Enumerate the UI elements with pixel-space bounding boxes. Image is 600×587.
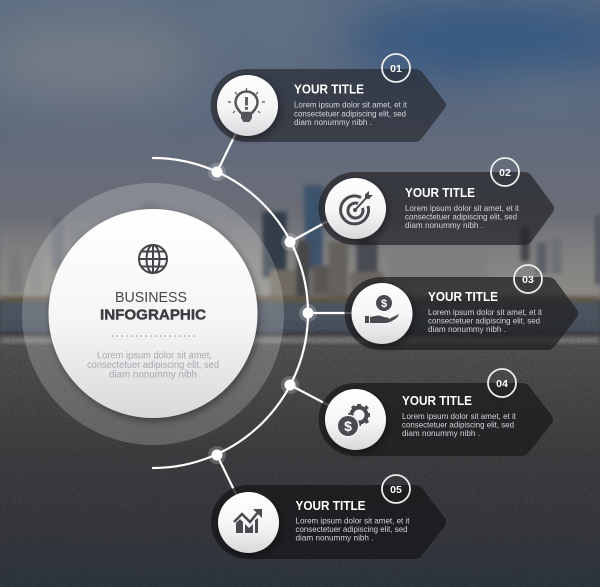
heading: INFOGRAPHIC bbox=[100, 306, 206, 324]
title and text: diam nonummy nibh . bbox=[294, 117, 372, 127]
arc nodes bbox=[208, 163, 317, 464]
icon: light bulb bbox=[228, 88, 265, 122]
title and text: YOUR TITLE bbox=[402, 393, 472, 408]
title and text: consectetuer adipiscing elit, sed bbox=[428, 316, 540, 326]
title and text bbox=[296, 498, 410, 543]
description: diam nonummy nibh bbox=[109, 370, 197, 380]
icon: gear and coin: $ bbox=[344, 418, 352, 434]
icon: growth chart bbox=[234, 509, 262, 533]
heading bbox=[100, 289, 206, 324]
badge 03: 03 bbox=[522, 274, 534, 286]
title and text: Lorem ipsum dolor sit amet, et it bbox=[405, 203, 520, 213]
title and text: Lorem ipsum dolor sit amet, et it bbox=[296, 516, 410, 526]
outer translucent ring bbox=[22, 183, 284, 445]
title and text: diam nonummy nibh . bbox=[296, 533, 374, 543]
title and text bbox=[428, 289, 543, 334]
arrow banner bbox=[211, 485, 446, 559]
icon: target bbox=[341, 191, 373, 224]
arrow banner bbox=[345, 277, 578, 350]
arrow banner bbox=[210, 69, 446, 142]
disc bbox=[218, 492, 279, 553]
title and text: YOUR TITLE bbox=[294, 81, 364, 96]
dotted divider bbox=[112, 335, 195, 337]
disc bbox=[325, 178, 386, 239]
title and text: Lorem ipsum dolor sit amet, et it bbox=[294, 100, 408, 110]
title and text: diam nonummy nibh . bbox=[428, 324, 506, 334]
title and text bbox=[294, 81, 408, 127]
icon: hand holding coin bbox=[365, 295, 399, 323]
title and text: YOUR TITLE bbox=[405, 185, 475, 200]
panel: item 03 bbox=[345, 265, 578, 350]
main white disc bbox=[48, 209, 258, 418]
badge 04: 04 bbox=[496, 378, 508, 390]
badge 03 bbox=[514, 265, 542, 293]
title and text: diam nonummy nibh . bbox=[405, 220, 483, 230]
arrow banner bbox=[318, 383, 553, 456]
heading: BUSINESS bbox=[115, 289, 187, 306]
description bbox=[87, 350, 219, 380]
badge 01: 01 bbox=[390, 63, 402, 75]
arc timeline with connectors bbox=[153, 133, 352, 494]
title and text: diam nonummy nibh . bbox=[402, 428, 480, 438]
icon: hand holding coin: $ bbox=[381, 298, 387, 310]
icon: gear and coin bbox=[336, 404, 370, 438]
badge 02 bbox=[491, 158, 519, 186]
title and text: Lorem ipsum dolor sit amet, et it bbox=[402, 411, 517, 421]
title and text bbox=[402, 393, 517, 438]
badge 05 bbox=[382, 475, 410, 503]
panel: item 01 bbox=[210, 54, 446, 142]
title and text: consectetuer adipiscing elit, sed bbox=[405, 212, 517, 222]
title and text: YOUR TITLE bbox=[428, 289, 498, 304]
disc bbox=[352, 283, 412, 344]
title and text bbox=[405, 185, 520, 230]
central panel bbox=[22, 183, 284, 445]
title and text: consectetuer adipiscing elit, sed bbox=[294, 108, 406, 118]
arrow banner bbox=[318, 172, 554, 245]
badge 05: 05 bbox=[390, 484, 402, 496]
icon: globe bbox=[139, 245, 167, 273]
badge 01 bbox=[382, 54, 410, 82]
panel: item 05 bbox=[211, 475, 446, 559]
title and text: Lorem ipsum dolor sit amet, et it bbox=[428, 307, 543, 317]
title and text: YOUR TITLE bbox=[296, 498, 366, 513]
disc bbox=[325, 389, 386, 450]
description: consectetuer adipiscing elit, sed bbox=[87, 360, 219, 371]
title and text: consectetuer adipiscing elit, sed bbox=[402, 419, 514, 429]
badge 04 bbox=[488, 369, 516, 397]
badge 02: 02 bbox=[499, 167, 511, 179]
disc bbox=[217, 75, 278, 136]
title and text: consectetuer adipiscing elit, sed bbox=[296, 524, 408, 534]
panel: item 04 bbox=[318, 369, 553, 456]
panel: item 02 bbox=[318, 158, 554, 245]
description: Lorem ipsum dolor sit amet, bbox=[97, 350, 212, 362]
